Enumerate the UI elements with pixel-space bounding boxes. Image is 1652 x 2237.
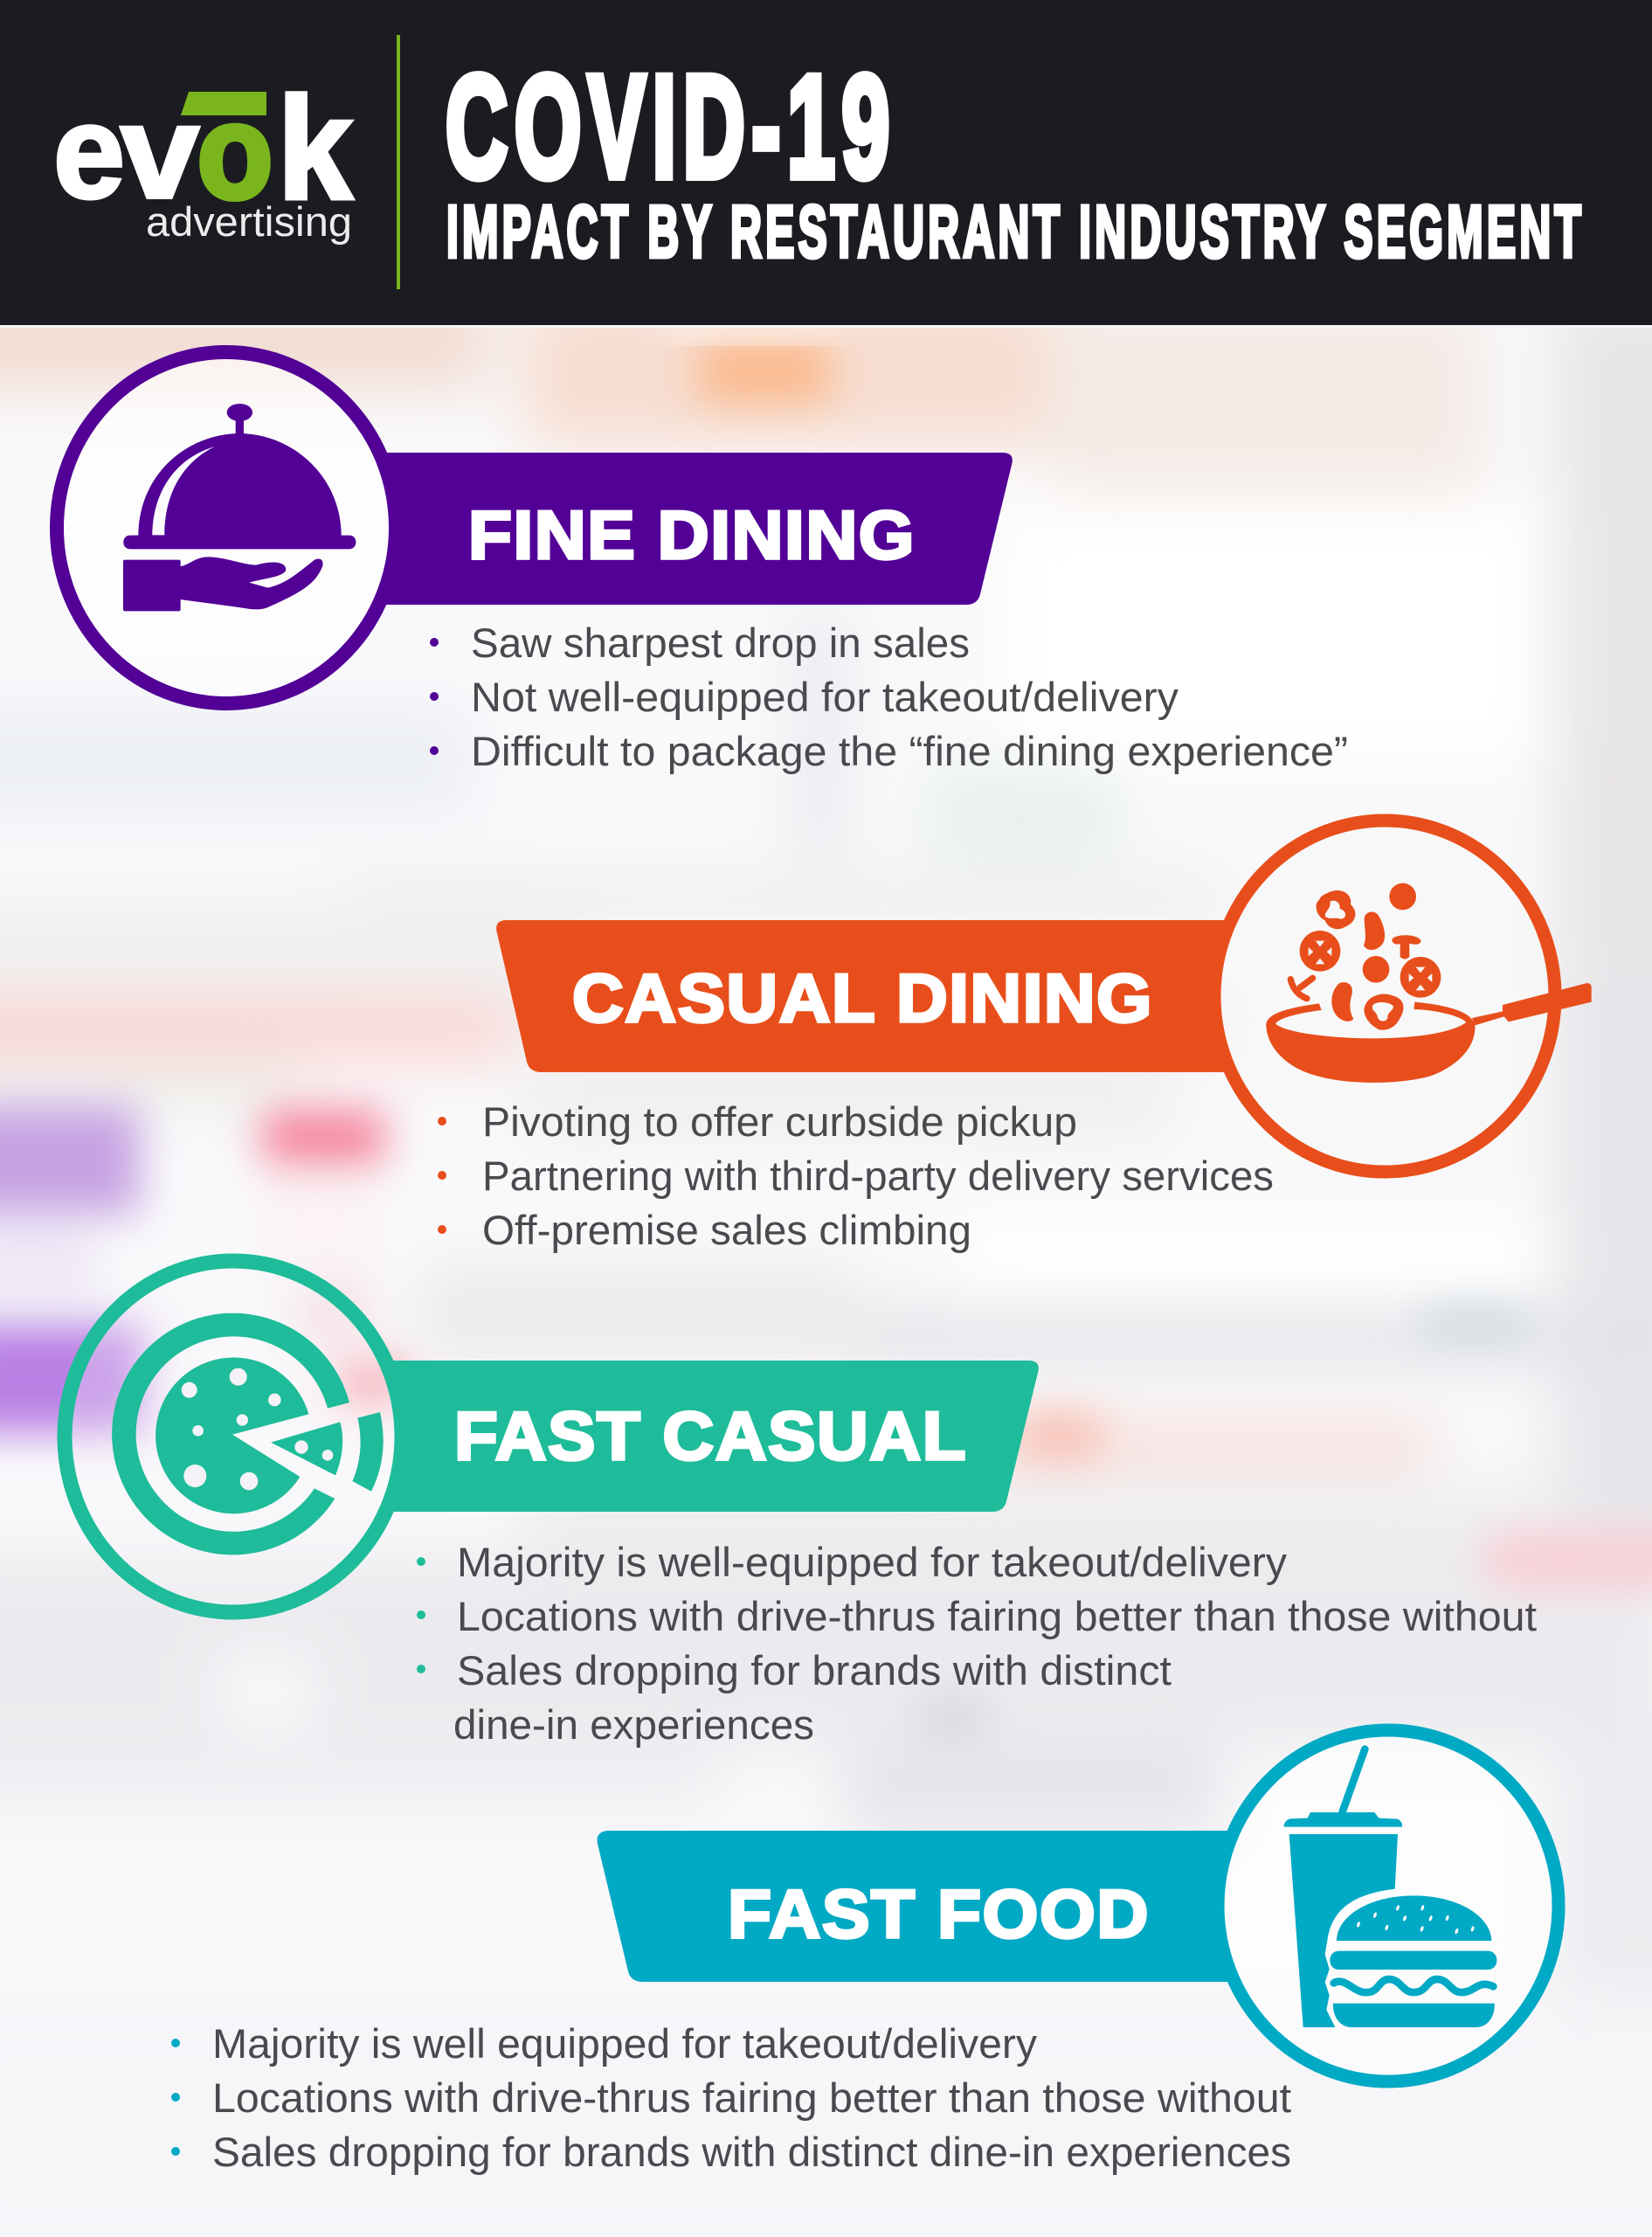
title: COVID-19 [446,46,896,208]
bullet list: casual dining: Partnering with third-party delivery services [482,1153,1274,1199]
icon: cloche on hand [57,352,396,703]
icon: frying pan [1214,821,1592,1172]
bullet list: fine dining: Not well-equipped for takeout/delivery [471,674,1179,720]
panel: fast casual [65,1261,1537,1748]
blurred restaurant background [0,328,1652,1989]
bullet list: fast food: Locations with drive-thrus fairing better than those without [212,2074,1291,2121]
heading: casual dining: CASUAL DINING [572,959,1153,1036]
bullet list: casual dining [438,1098,1274,1253]
panel: casual dining [438,821,1592,1253]
logo: evok advertising: v [121,78,199,226]
banner: casual dining [496,920,1231,1072]
heading: fast food: FAST FOOD [728,1875,1150,1952]
bullet list: fast casual [417,1539,1537,1748]
header bar [0,0,1652,328]
bullet list: fast food: Sales dropping for brands with distinct dine-in experiences [212,2129,1291,2175]
icon: burger and drink [1218,1730,1559,2081]
panel: fast food [171,1730,1559,2175]
bullet list: fast casual: Locations with drive-thrus fairing better than those without [457,1593,1537,1639]
bullet list: fast casual: dine-in experiences [453,1701,814,1748]
banner: fast casual [385,1361,1039,1512]
heading: fine dining: FINE DINING [468,496,916,573]
logo: evok advertising: k [278,68,353,230]
bullet list: fast casual: Majority is well-equipped for takeout/delivery [457,1539,1288,1585]
bullet list: fast food: Majority is well equipped for takeout/delivery [212,2020,1038,2067]
bullet list: fine dining: Saw sharpest drop in sales [471,620,970,666]
bullet list: fast casual: Sales dropping for brands with distinct [457,1647,1172,1693]
banner: fast food [598,1831,1234,1982]
logo: evok advertising [53,68,353,245]
bullet list: casual dining: Pivoting to offer curbside pickup [482,1098,1077,1145]
bullet list: fast food [171,2020,1291,2175]
logo: evok advertising: o [197,78,273,226]
bullet list: fine dining [430,620,1348,774]
icon: pizza [65,1261,402,1612]
panel: fine dining [57,352,1348,774]
heading: fast casual: FAST CASUAL [454,1397,967,1474]
logo: evok advertising: e [53,78,125,226]
bullet list: fine dining: Difficult to package the “fine dining experience” [471,728,1348,774]
logo: evok advertising: advertising [146,198,352,245]
banner: fine dining [379,453,1013,605]
bullet list: casual dining: Off-premise sales climbing [482,1207,971,1253]
